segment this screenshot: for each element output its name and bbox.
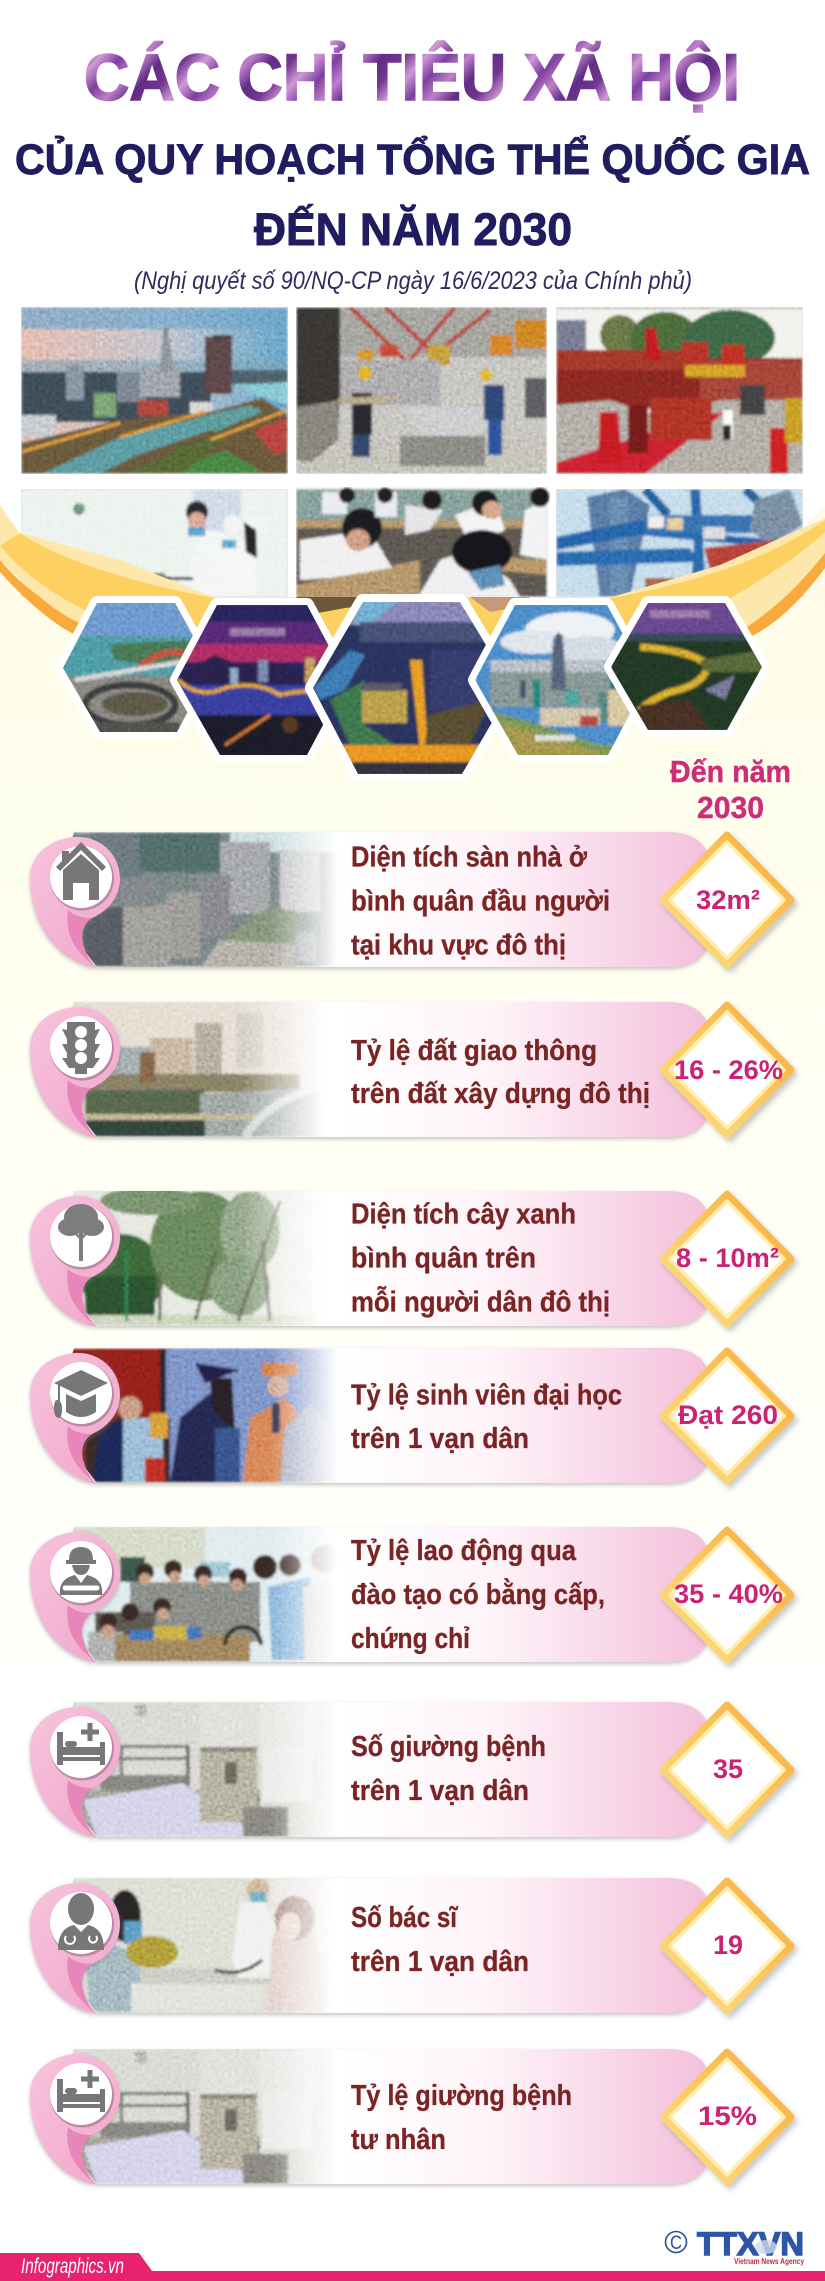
footer bar [0,2253,825,2281]
row: traffic land [30,1002,791,1138]
title [15,40,810,255]
row: private hospital beds [30,2049,791,2185]
label: traffic land: trên đất xây dựng đô thị [351,1078,650,1110]
logo: TTXVN: TTXVN [697,2226,804,2262]
icon detail: wrench [65,1586,97,1590]
logo: TTXVN [666,2226,804,2266]
logo: TTXVN: C [670,2233,682,2254]
photo: port cranes [556,489,803,597]
hexagon photo row [60,600,765,776]
row: hospital beds [30,1702,791,1838]
label: private beds: tư nhân [351,2124,446,2156]
label: doctors: Số bác sĩ [351,1902,459,1934]
photo: city skyline [21,307,288,474]
photo: festival parade [556,307,803,474]
photo: students in exam [296,487,550,600]
icon: tree [58,1204,104,1261]
label: hospital beds [351,1731,546,1807]
label: trained labour: đào tạo có bằng cấp, [351,1577,605,1611]
row: university students [30,1348,791,1484]
hexagon: river bridge [60,600,215,740]
footer bar: Infographics.vn [21,2255,124,2278]
photo: car factory [296,307,547,474]
icon: doctor [58,1893,104,1950]
value: Đạt 260: Đạt 260 [678,1400,778,1430]
icon: traffic light [62,1022,100,1074]
hexagon: night riverside [610,600,765,732]
icon: hospital bed [57,1723,105,1765]
decorative yellow swoosh [0,505,825,640]
hexagon: skyline with clouds [475,603,650,760]
label: housing [351,842,610,962]
row: doctors [30,1878,791,2014]
label: green area: Diện tích cây xanh [351,1198,576,1230]
heading: Đến năm 2030 [670,754,791,825]
label: green area [351,1198,610,1318]
subtitle: (Nghị quyết số 90/NQ-CP ngày 16/6/2023 của Chính phủ) [134,267,692,295]
label: doctors [351,1902,529,1978]
value: 8 - 10m²: 8 - 10m² [676,1243,779,1273]
photo bits overlapping the swoosh [296,597,530,613]
label: housing: Diện tích sàn nhà ở [351,842,587,874]
label: traffic land: Tỷ lệ đất giao thông [351,1035,597,1067]
label: housing: tại khu vực đô thị [351,930,566,962]
logo: TTXVN: Vietnam News Agency [734,2257,804,2266]
row: green area [30,1187,791,1327]
title: CÁC CHỈ TIÊU XÃ HỘI [84,40,740,114]
label: university students [351,1380,622,1455]
value: 15%: 15% [698,2101,757,2131]
label: trained labour: Tỷ lệ lao động qua [351,1535,577,1567]
label: private beds [351,2080,572,2156]
icon: hospital bed [57,2070,105,2112]
label: trained labour: chứng chỉ [351,1623,470,1655]
value: 32m²: 32m² [696,885,760,915]
hexagon: aerial city centre [310,600,515,776]
icon: graduation cap [54,1370,108,1418]
label: university students: Tỷ lệ sinh viên đại học [351,1380,622,1412]
label: university students: trên 1 vạn dân [351,1423,529,1455]
photo: clinic doctors [21,489,288,597]
label: trained labour [351,1535,605,1655]
title: ĐẾN NĂM 2030 [254,204,572,255]
label: hospital beds: Số giường bệnh [351,1731,546,1763]
title: CỦA QUY HOẠCH TỔNG THỂ QUỐC GIA [15,134,810,184]
label: green area: bình quân trên [351,1242,536,1274]
label: traffic land [351,1035,650,1110]
hexagon: night bridge [175,603,350,758]
label: green area: mỗi người dân đô thị [351,1284,610,1318]
label: housing: bình quân đầu người [351,886,610,918]
icon: house [56,842,106,900]
icon: worker with wrench [60,1547,102,1595]
row: housing area [30,832,791,968]
heading: Đến năm 2030: 2030 [697,790,764,825]
label: doctors: trên 1 vạn dân [351,1946,529,1978]
value: 35: 35 [713,1754,743,1784]
row: trained labour [30,1527,791,1663]
value: 19: 19 [713,1930,743,1960]
label: private beds: Tỷ lệ giường bệnh [351,2080,572,2112]
value: 35 - 40%: 35 - 40% [674,1579,783,1609]
label: hospital beds: trên 1 vạn dân [351,1775,529,1807]
value: 16 - 26%: 16 - 26% [674,1055,783,1085]
heading: Đến năm 2030: Đến năm [670,754,791,789]
